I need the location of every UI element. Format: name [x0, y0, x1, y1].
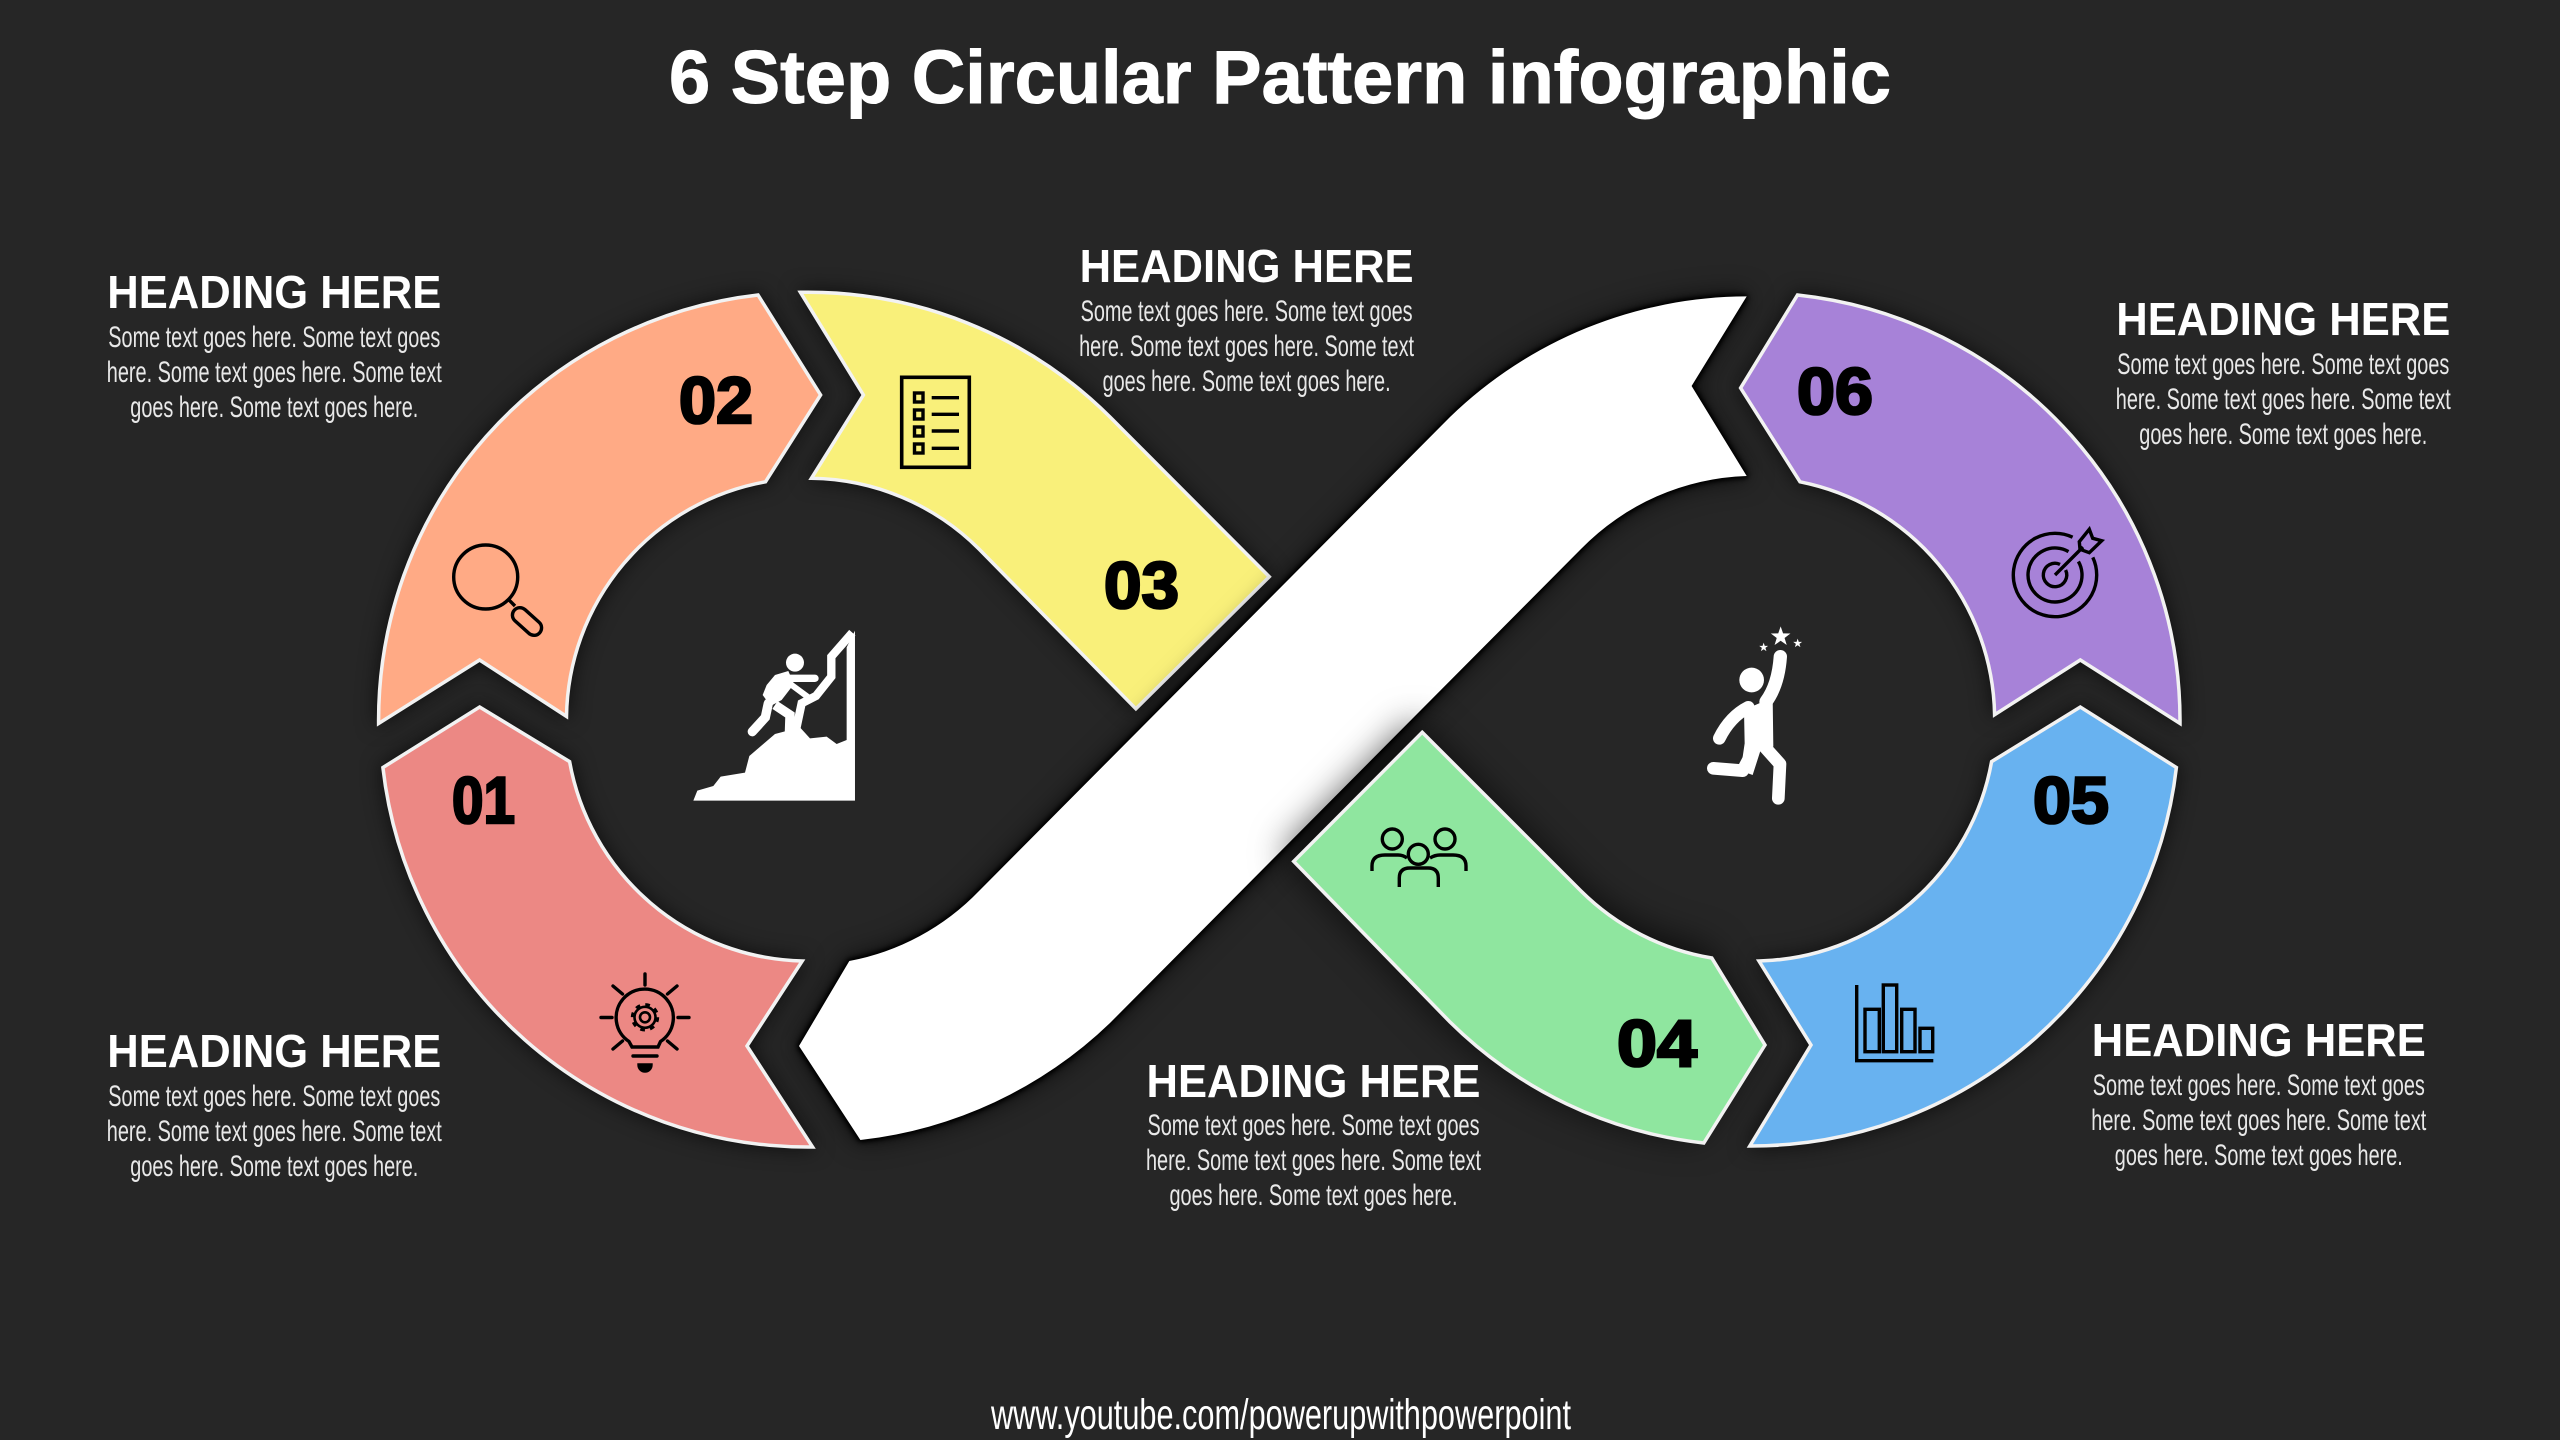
segment 04: green band [1294, 732, 1765, 1143]
number 01: 01 [452, 763, 515, 837]
text block: bottom left: HEADING HERE [107, 1025, 441, 1077]
segment 02: orange arc [379, 295, 821, 724]
text block: bottom right: HEADING HERE [2092, 1014, 2426, 1066]
text block: bottom left: Some text goes here. Some text goes [108, 1080, 440, 1113]
text block: bottom left: goes here. Some text goes here. [130, 1150, 418, 1183]
segment 03: yellow band [800, 292, 1269, 709]
text block: bottom left: here. Some text goes here. Some text [107, 1115, 442, 1148]
number 02: 02 [679, 363, 753, 437]
icon: light bulb with gear [601, 974, 689, 1071]
icon: climber on a cliff [693, 631, 855, 801]
text block: top left: HEADING HERE [107, 266, 441, 318]
text block: top left [107, 266, 442, 424]
text block: bottom left [107, 1025, 442, 1183]
icon: target with arrow [2013, 529, 2102, 617]
text block: top right [2116, 293, 2451, 451]
segment 01: red arc [383, 707, 813, 1147]
number 06: 06 [1797, 354, 1873, 428]
icon: checklist [902, 377, 969, 467]
text block: top left: Some text goes here. Some text goes [108, 321, 440, 354]
icon: group of people [1372, 829, 1466, 887]
text block: top middle: goes here. Some text goes here. [1103, 365, 1391, 398]
text block: top right: HEADING HERE [2116, 293, 2450, 345]
text block: bottom middle: HEADING HERE [1146, 1055, 1480, 1107]
number 04: 04 [1617, 1006, 1697, 1080]
text block: top left: goes here. Some text goes here. [130, 391, 418, 424]
number 05: 05 [2033, 763, 2109, 837]
text block: top middle: here. Some text goes here. Some text [1079, 330, 1415, 363]
text block: bottom right [2091, 1014, 2427, 1172]
icon: jumper reaching for stars [1713, 626, 1802, 798]
text block: top middle: HEADING HERE [1080, 240, 1414, 292]
segment 05: blue arc [1750, 707, 2176, 1146]
text block: bottom middle: Some text goes here. Some text goes [1148, 1109, 1480, 1142]
text block: top left: here. Some text goes here. Some text [107, 356, 442, 389]
text block: top middle: Some text goes here. Some text goes [1081, 295, 1413, 328]
icon: bar chart [1857, 985, 1933, 1061]
text block: bottom middle: here. Some text goes here. Some text [1146, 1144, 1481, 1177]
white crossing band [799, 296, 1747, 1140]
number 03: 03 [1104, 548, 1179, 622]
text block: bottom middle: goes here. Some text goes here. [1170, 1179, 1458, 1212]
text block: bottom middle [1146, 1055, 1481, 1212]
segment 06: purple arc [1741, 295, 2180, 724]
text block: top middle [1079, 240, 1415, 398]
icon: magnifier [454, 545, 545, 638]
title: 6 Step Circular Pattern infographic [669, 35, 1891, 119]
text block: bottom right: goes here. Some text goes here. [2115, 1139, 2403, 1172]
footer url: www.youtube.com/powerupwithpowerpoint [990, 1391, 1571, 1439]
